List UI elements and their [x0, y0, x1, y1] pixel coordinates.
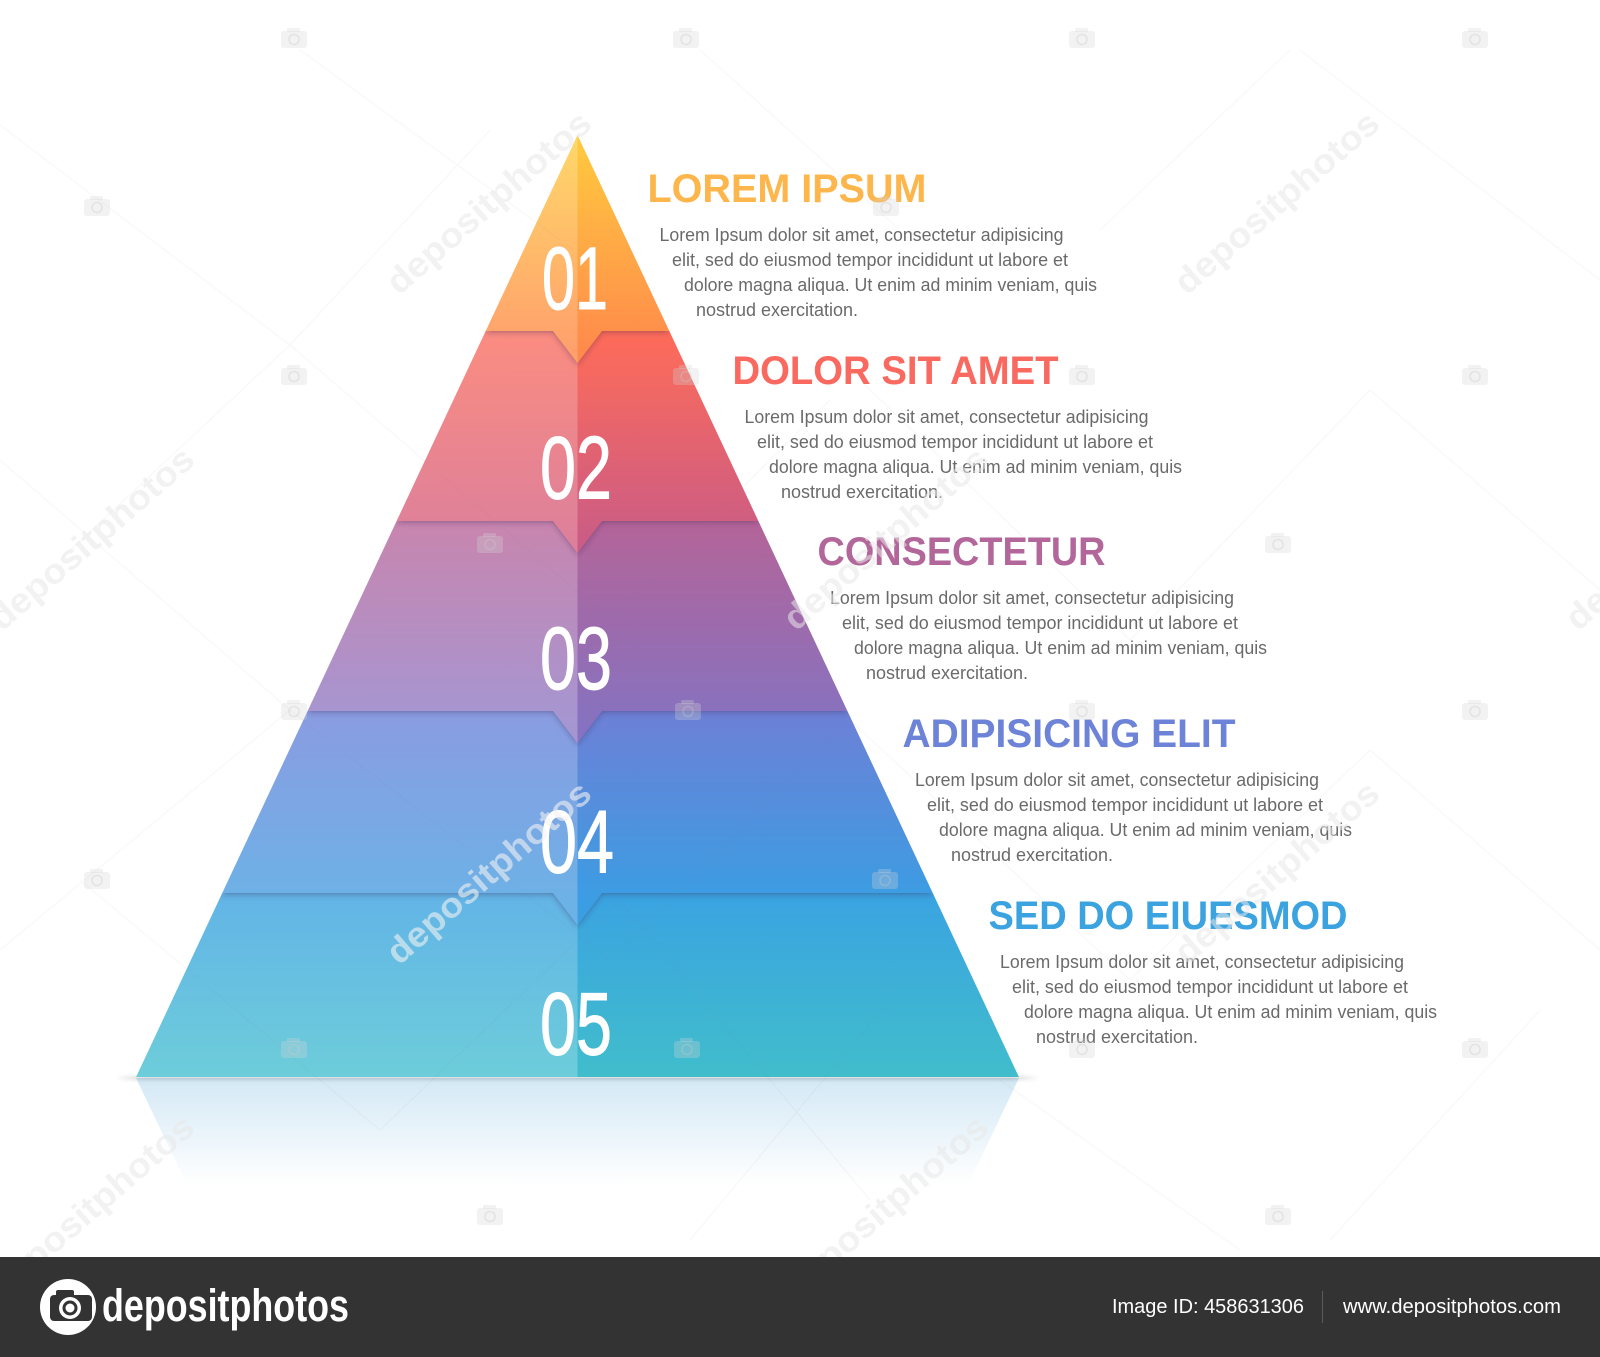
heading: DOLOR SIT AMET — [732, 349, 1058, 393]
pyramid — [136, 135, 1019, 1077]
body text: elit, sed do eiusmod tempor incididunt ut labore et — [927, 795, 1323, 815]
heading: SED DO EIUESMOD — [988, 894, 1348, 938]
body text — [660, 225, 1097, 320]
pyramid reflection — [136, 1078, 1019, 1185]
body text — [830, 588, 1267, 683]
body text: dolore magna aliqua. Ut enim ad minim veniam, quis — [684, 275, 1097, 295]
panel: consectetur — [818, 530, 1267, 683]
heading: LOREM IPSUM — [648, 167, 926, 211]
heading: CONSECTETUR — [818, 530, 1106, 574]
footer bar — [0, 1257, 1600, 1357]
body text: Lorem Ipsum dolor sit amet, consectetur adipisicing — [1000, 952, 1404, 972]
panel: adipisicing elit — [902, 712, 1352, 865]
body text: nostrud exercitation. — [951, 845, 1113, 865]
body text: dolore magna aliqua. Ut enim ad minim veniam, quis — [769, 457, 1182, 477]
number 01: 01 — [542, 228, 608, 328]
watermark wordmarks: depositphotos — [1167, 103, 1387, 302]
watermark wordmarks: depositphotos — [379, 103, 599, 302]
body text: Lorem Ipsum dolor sit amet, consectetur adipisicing — [744, 407, 1148, 427]
number 03: 03 — [540, 608, 612, 708]
body text — [1000, 952, 1437, 1047]
body text: nostrud exercitation. — [866, 663, 1028, 683]
body text: nostrud exercitation. — [1036, 1027, 1198, 1047]
band 5 — [136, 893, 1019, 1077]
image id: Image ID: 458631306 — [1112, 1296, 1304, 1318]
body text: Lorem Ipsum dolor sit amet, consectetur adipisicing — [830, 588, 1234, 608]
panel: lorem ipsum — [648, 167, 1097, 320]
watermark wordmarks: depositphotos — [379, 773, 599, 972]
body text: dolore magna aliqua. Ut enim ad minim veniam, quis — [1024, 1002, 1437, 1022]
watermark wordmarks: depositphotos — [776, 439, 996, 638]
heading: ADIPISICING ELIT — [902, 712, 1236, 756]
body text: Lorem Ipsum dolor sit amet, consectetur adipisicing — [660, 225, 1064, 245]
icon: camera logo — [40, 1279, 96, 1335]
watermark wordmarks: depositphotos — [1167, 773, 1387, 972]
body text: elit, sed do eiusmod tempor incididunt ut labore et — [672, 250, 1068, 270]
body text: elit, sed do eiusmod tempor incididunt ut labore et — [1012, 977, 1408, 997]
panel: sed do eiuesmod — [988, 894, 1437, 1047]
body text: elit, sed do eiusmod tempor incididunt ut labore et — [757, 432, 1153, 452]
body text: nostrud exercitation. — [781, 482, 943, 502]
band 4 — [222, 711, 933, 925]
body text: dolore magna aliqua. Ut enim ad minim veniam, quis — [939, 820, 1352, 840]
body text — [744, 407, 1182, 502]
number 04: 04 — [540, 792, 614, 892]
watermark camera icons — [84, 28, 1488, 1225]
logo wordmark: depositphotos — [102, 1280, 349, 1331]
body text: elit, sed do eiusmod tempor incididunt ut labore et — [842, 613, 1238, 633]
band 3 — [308, 521, 848, 743]
floor shadow — [115, 1076, 1040, 1080]
panel: dolor sit amet — [732, 349, 1182, 502]
band 1 — [486, 135, 669, 363]
number 05: 05 — [540, 974, 612, 1074]
body text: nostrud exercitation. — [696, 300, 858, 320]
body text: dolore magna aliqua. Ut enim ad minim veniam, quis — [854, 638, 1267, 658]
band 2 — [396, 331, 758, 553]
body text — [915, 770, 1352, 865]
number 02: 02 — [540, 418, 612, 518]
website url: www.depositphotos.com — [1342, 1296, 1561, 1318]
watermark wordmarks: depositphotos — [776, 1107, 996, 1306]
body text: Lorem Ipsum dolor sit amet, consectetur adipisicing — [915, 770, 1319, 790]
